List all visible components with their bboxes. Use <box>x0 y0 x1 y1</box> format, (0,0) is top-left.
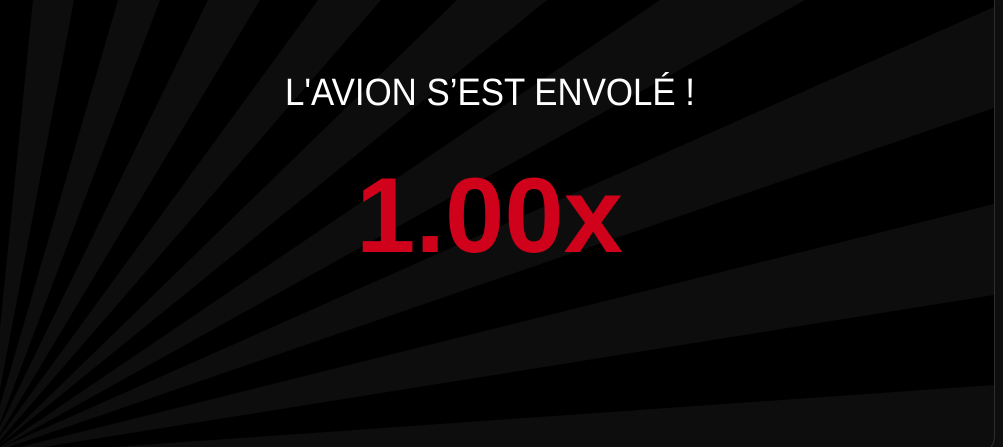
multiplier value: 1.00x <box>356 155 623 275</box>
heading: L'AVION S’EST ENVOLÉ ! <box>285 71 695 114</box>
right edge strip <box>991 0 1003 447</box>
